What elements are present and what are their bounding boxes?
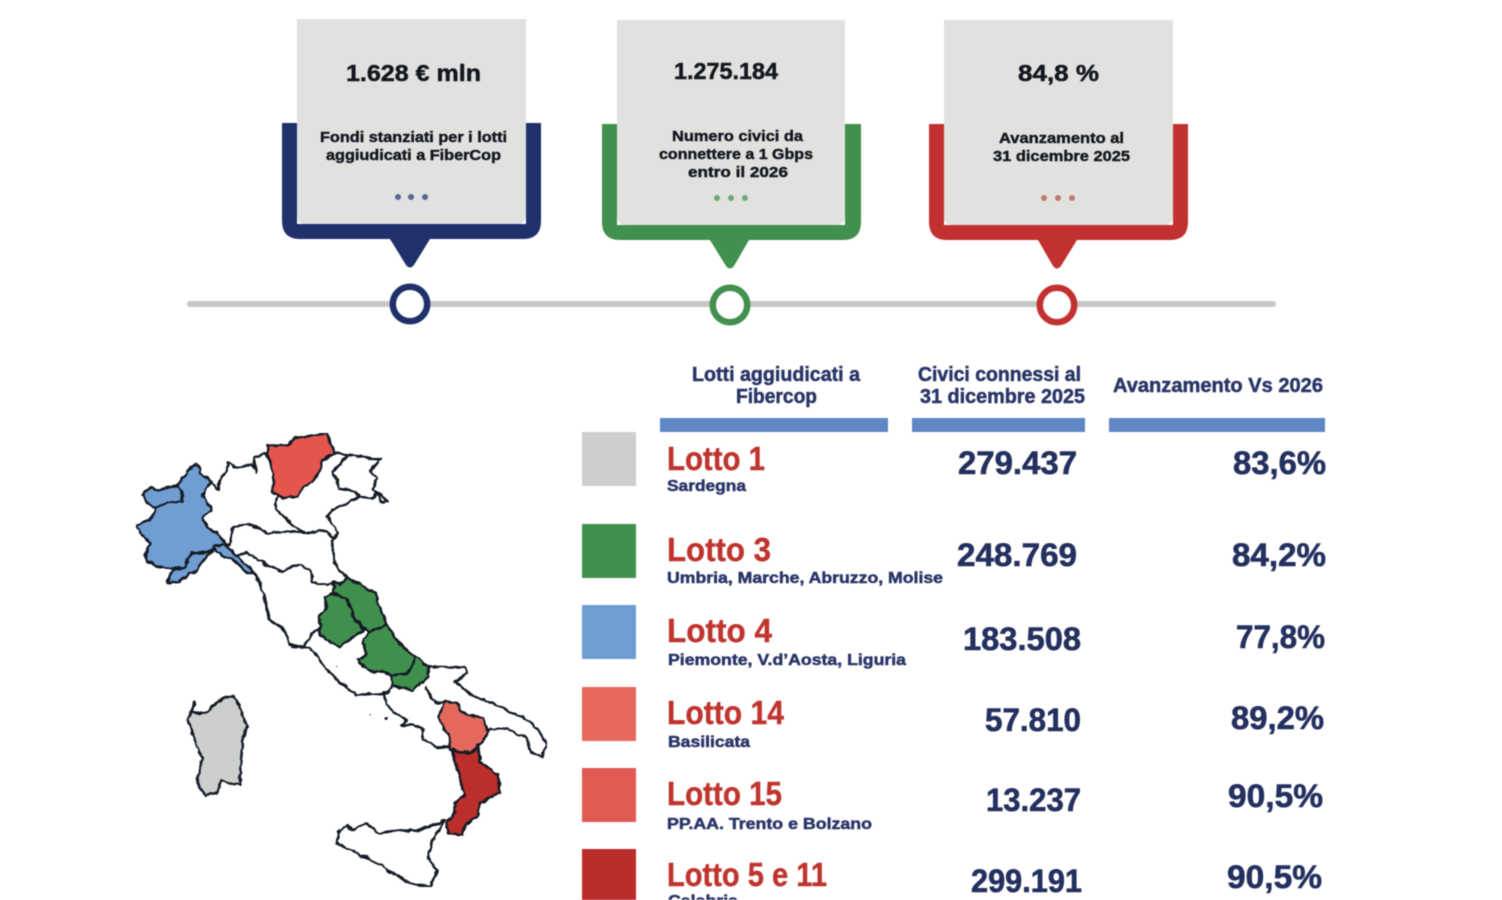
timeline marker [713,288,747,322]
timeline marker [393,287,427,321]
regions: Basilicata [668,734,750,751]
dots [1041,195,1075,201]
card frame [282,123,541,268]
lot name: Lotto 14 [667,694,785,731]
connected addresses: 13.237 [986,782,1081,818]
row: Lotto 15 [582,768,1323,833]
progress: 90,5% [1227,859,1322,895]
panel: funds card [282,19,541,321]
swatch [582,849,636,900]
card background [297,19,526,224]
islands [336,666,389,720]
progress: 83,6% [1233,445,1326,481]
region outlines: Campania and Lazio [383,685,445,702]
region: Valle d'Aosta [142,485,182,508]
dots [714,195,748,201]
column bar: progress [1109,418,1325,432]
swatch [582,524,636,578]
lot name: Lotto 15 [667,775,782,812]
region: Sicilia [337,820,445,887]
regions: Piemonte, V.d’Aosta, Liguria [668,652,906,669]
column heading: connected addresses: 31 dicembre 2025 [920,386,1085,408]
regions: Sardegna [667,478,746,495]
value: 1.275.184 [674,58,778,84]
description: Avanzamento al [999,130,1124,147]
lot name: Lotto 4 [667,612,773,649]
progress: 77,8% [1236,619,1325,655]
description [993,130,1130,165]
region: Molise [391,657,429,690]
column heading: connected addresses: Civici connessi al [918,364,1081,386]
column heading: lots: Fibercop [736,386,817,408]
row: Lotto 3 [582,524,1326,587]
region: Trentino-Alto Adige [267,433,335,498]
row: Lotto 1 [582,432,1326,495]
description: aggiudicati a FiberCop [326,147,501,164]
timeline line [187,301,1276,307]
map of Italy [136,433,547,887]
region outlines: Puglia [429,667,547,757]
progress: 84,2% [1232,537,1326,573]
lot name: Lotto 1 [667,440,765,477]
region: Abruzzo [357,625,416,676]
column bar: lots [660,418,888,432]
value: 1.628 € mln [346,60,481,86]
description: Numero civici da [672,128,804,145]
card frame [602,124,861,268]
swatch [582,432,636,486]
column bar: connected addresses [912,418,1085,432]
connected addresses: 183.508 [963,621,1081,657]
timeline marker [1040,288,1074,322]
connected addresses: 248.769 [957,537,1077,573]
description [320,129,507,164]
row: Lotto 5 e 11 [582,849,1322,900]
panel: progress card [929,20,1188,322]
region: Sardegna [188,697,247,795]
column heading: lots [692,364,861,408]
regions: Umbria, Marche, Abruzzo, Molise [667,570,943,587]
region: Marche [332,578,387,632]
description: Fondi stanziati per i lotti [320,129,507,146]
card frame [929,124,1188,268]
description: entro il 2026 [688,164,788,181]
connected addresses: 57.810 [985,702,1081,738]
lot name: Lotto 5 e 11 [667,856,827,893]
row: Lotto 4 [582,605,1325,669]
region outlines: Tyrrhenian coast [290,645,448,748]
row: Lotto 14 [582,687,1324,751]
region outlines: centre [255,573,320,647]
connected addresses: 279.437 [958,445,1077,481]
progress: 90,5% [1228,778,1323,814]
region: Piemonte [136,463,226,568]
card background [617,20,845,225]
swatch [582,605,636,659]
swatch [582,687,636,741]
dots [395,194,428,200]
card background [944,20,1173,225]
swatch [582,768,636,822]
progress: 89,2% [1231,700,1324,736]
region outlines: north [212,453,268,490]
region: Liguria [167,545,255,583]
connected addresses: 299.191 [971,863,1082,899]
region: Umbria [318,593,363,647]
table header [660,364,1325,432]
value: 84,8 % [1018,60,1099,86]
region: Basilicata [438,702,488,752]
panel: addresses card [602,20,861,322]
region: Calabria [447,745,500,835]
description: connettere a 1 Gbps [659,146,813,163]
column heading: connected addresses [918,364,1085,408]
region outlines: north east [327,453,387,578]
description [659,128,813,181]
description: 31 dicembre 2025 [993,148,1130,165]
regions: PP.AA. Trento e Bolzano [667,816,872,833]
lot name: Lotto 3 [667,531,771,568]
column heading: progress: Avanzamento Vs 2026 [1113,375,1323,397]
column heading: lots: Lotti aggiudicati a [692,364,861,386]
